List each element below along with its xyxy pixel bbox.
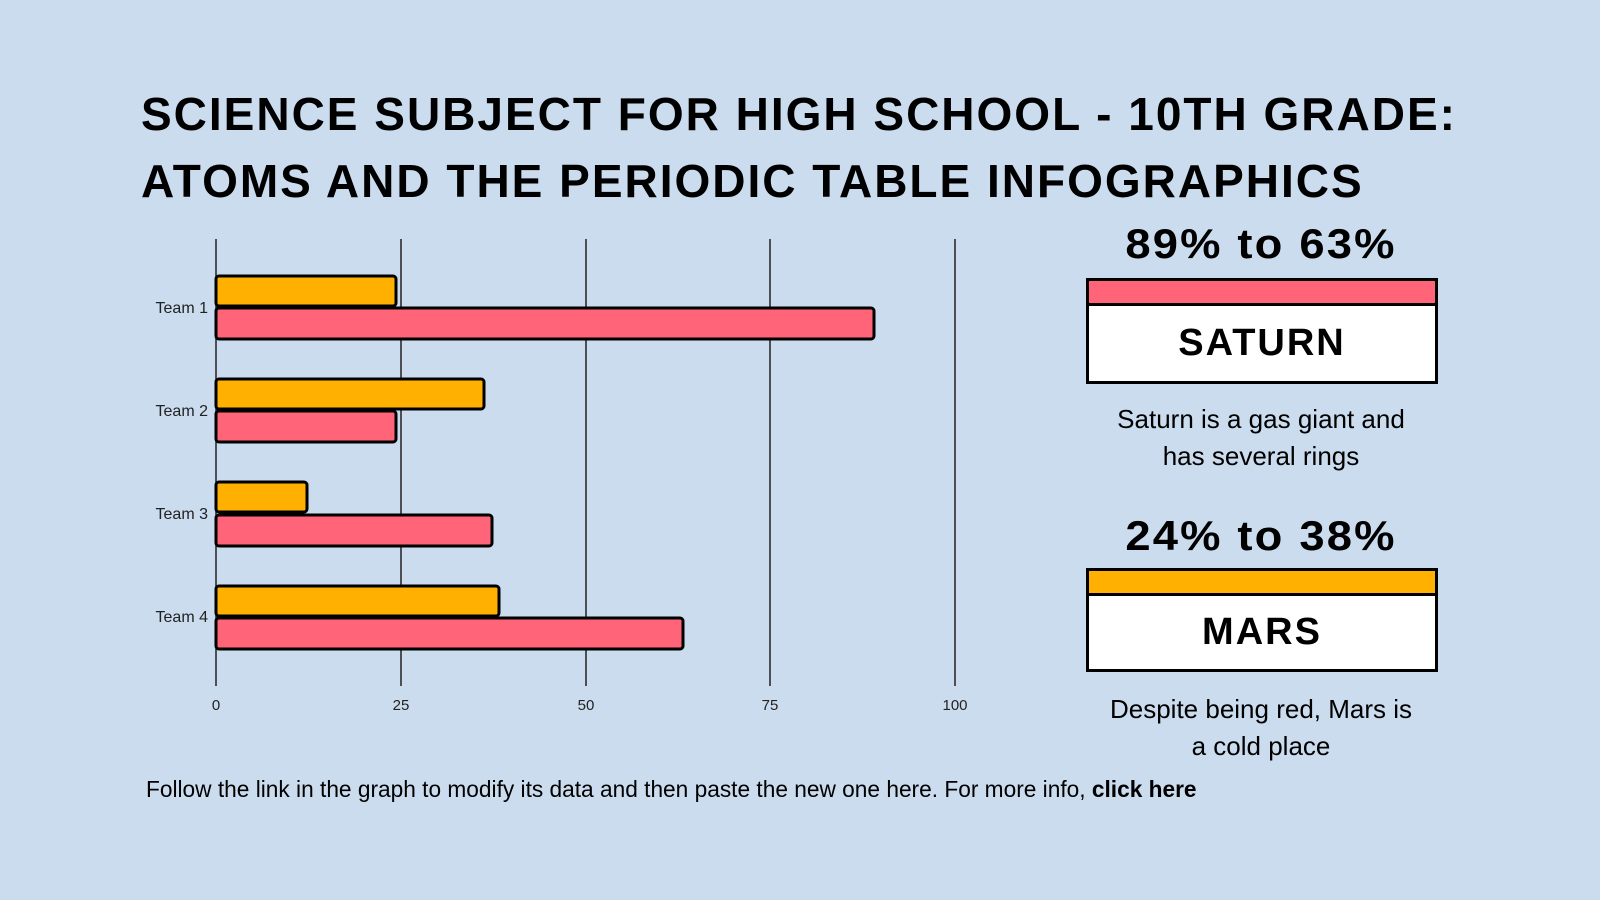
text: saturn description: Saturn is a gas giant and xyxy=(1117,404,1405,434)
text: mars description: Despite being red, Mars is xyxy=(1110,694,1412,724)
footer note: Follow the link in the graph to modify its data and then paste the new one here. For more info, click here xyxy=(146,776,1197,802)
panel: saturn xyxy=(1086,220,1438,471)
bar chart: 50 xyxy=(578,697,594,714)
text: mars description xyxy=(1110,694,1412,761)
heading: mars percent: 24% to 38% xyxy=(1125,512,1397,559)
bar chart xyxy=(156,239,968,714)
bar chart: 0 xyxy=(212,697,220,714)
text: saturn description: has several rings xyxy=(1163,441,1359,471)
bar chart: Team 2 xyxy=(156,403,208,420)
title xyxy=(141,88,1457,207)
bar chart: Team 3 xyxy=(156,506,208,523)
text: saturn description xyxy=(1117,404,1405,471)
bar chart: Team 1 xyxy=(156,300,208,317)
bar chart: Team 4 xyxy=(156,609,208,626)
card: mars: MARS xyxy=(1202,611,1322,653)
text: mars description: a cold place xyxy=(1192,731,1330,761)
bar chart: 75 xyxy=(762,697,778,714)
card: mars xyxy=(1086,568,1438,672)
title: ATOMS AND THE PERIODIC TABLE INFOGRAPHICS xyxy=(141,155,1364,207)
title: SCIENCE SUBJECT FOR HIGH SCHOOL - 10TH GRADE: xyxy=(141,88,1457,140)
panel: mars xyxy=(1086,512,1438,761)
bar chart: 100 xyxy=(942,697,968,714)
card: saturn: SATURN xyxy=(1178,322,1346,364)
heading: saturn percent: 89% to 63% xyxy=(1125,220,1397,267)
card: saturn xyxy=(1086,278,1438,384)
bar chart: 25 xyxy=(393,697,409,714)
